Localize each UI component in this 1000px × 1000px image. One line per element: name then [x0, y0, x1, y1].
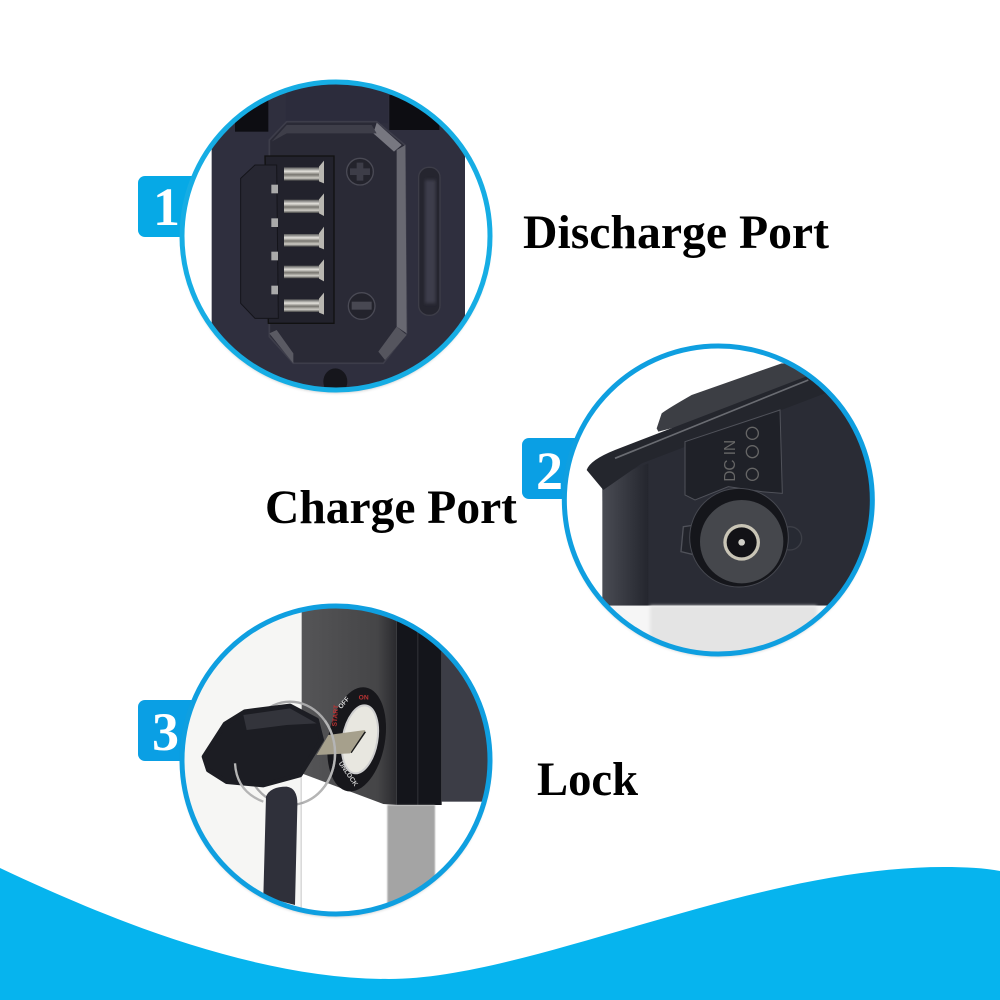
- small ring link: [235, 763, 263, 802]
- connector housing: [269, 122, 407, 363]
- photo circle 1: discharge port: [182, 77, 490, 397]
- silver lower strip: [387, 805, 435, 918]
- lower silver strip: [610, 606, 827, 634]
- lock cylinder: UNLOCK: [337, 760, 359, 788]
- socket recess: [265, 156, 334, 323]
- label: Discharge Port: Discharge Port: [523, 206, 829, 259]
- key ring behind head: [245, 702, 335, 805]
- lock cylinder: START: [332, 705, 340, 727]
- badge 2: 2: [536, 441, 563, 501]
- lock cylinder: OFF: [337, 696, 351, 711]
- photo circle 3: lock with key: [182, 600, 502, 933]
- label: Lock: Lock: [537, 753, 638, 806]
- battery casing: [602, 368, 875, 606]
- footer wave: [0, 867, 1000, 1000]
- contact pins: [271, 161, 324, 315]
- badge 1: 1: [153, 177, 180, 237]
- badge 3: [138, 700, 208, 762]
- screw plus: [347, 158, 373, 185]
- photo circle 2: charge port: [548, 346, 882, 666]
- label recess: [685, 410, 782, 500]
- key head: [204, 706, 322, 785]
- key head highlight: [243, 708, 317, 730]
- key fob: [263, 787, 297, 905]
- battery body: [212, 77, 465, 397]
- top cover: [657, 363, 815, 432]
- battery panel: [302, 600, 397, 805]
- charge port jack: [690, 488, 788, 587]
- badge 2: [522, 438, 592, 501]
- key blade: [317, 730, 365, 755]
- key ring front arc: [303, 721, 335, 803]
- port tab: [680, 525, 692, 555]
- badge 1: [138, 176, 208, 237]
- label text: DC IN: [722, 440, 739, 482]
- side label slot: [419, 167, 440, 315]
- bottom screw: [323, 368, 348, 388]
- label: Charge Port: Charge Port: [265, 481, 517, 534]
- lock cylinder: [327, 687, 386, 792]
- screw minus: [348, 293, 375, 319]
- lock cylinder: ON: [359, 694, 369, 701]
- badge 3: 3: [152, 702, 179, 762]
